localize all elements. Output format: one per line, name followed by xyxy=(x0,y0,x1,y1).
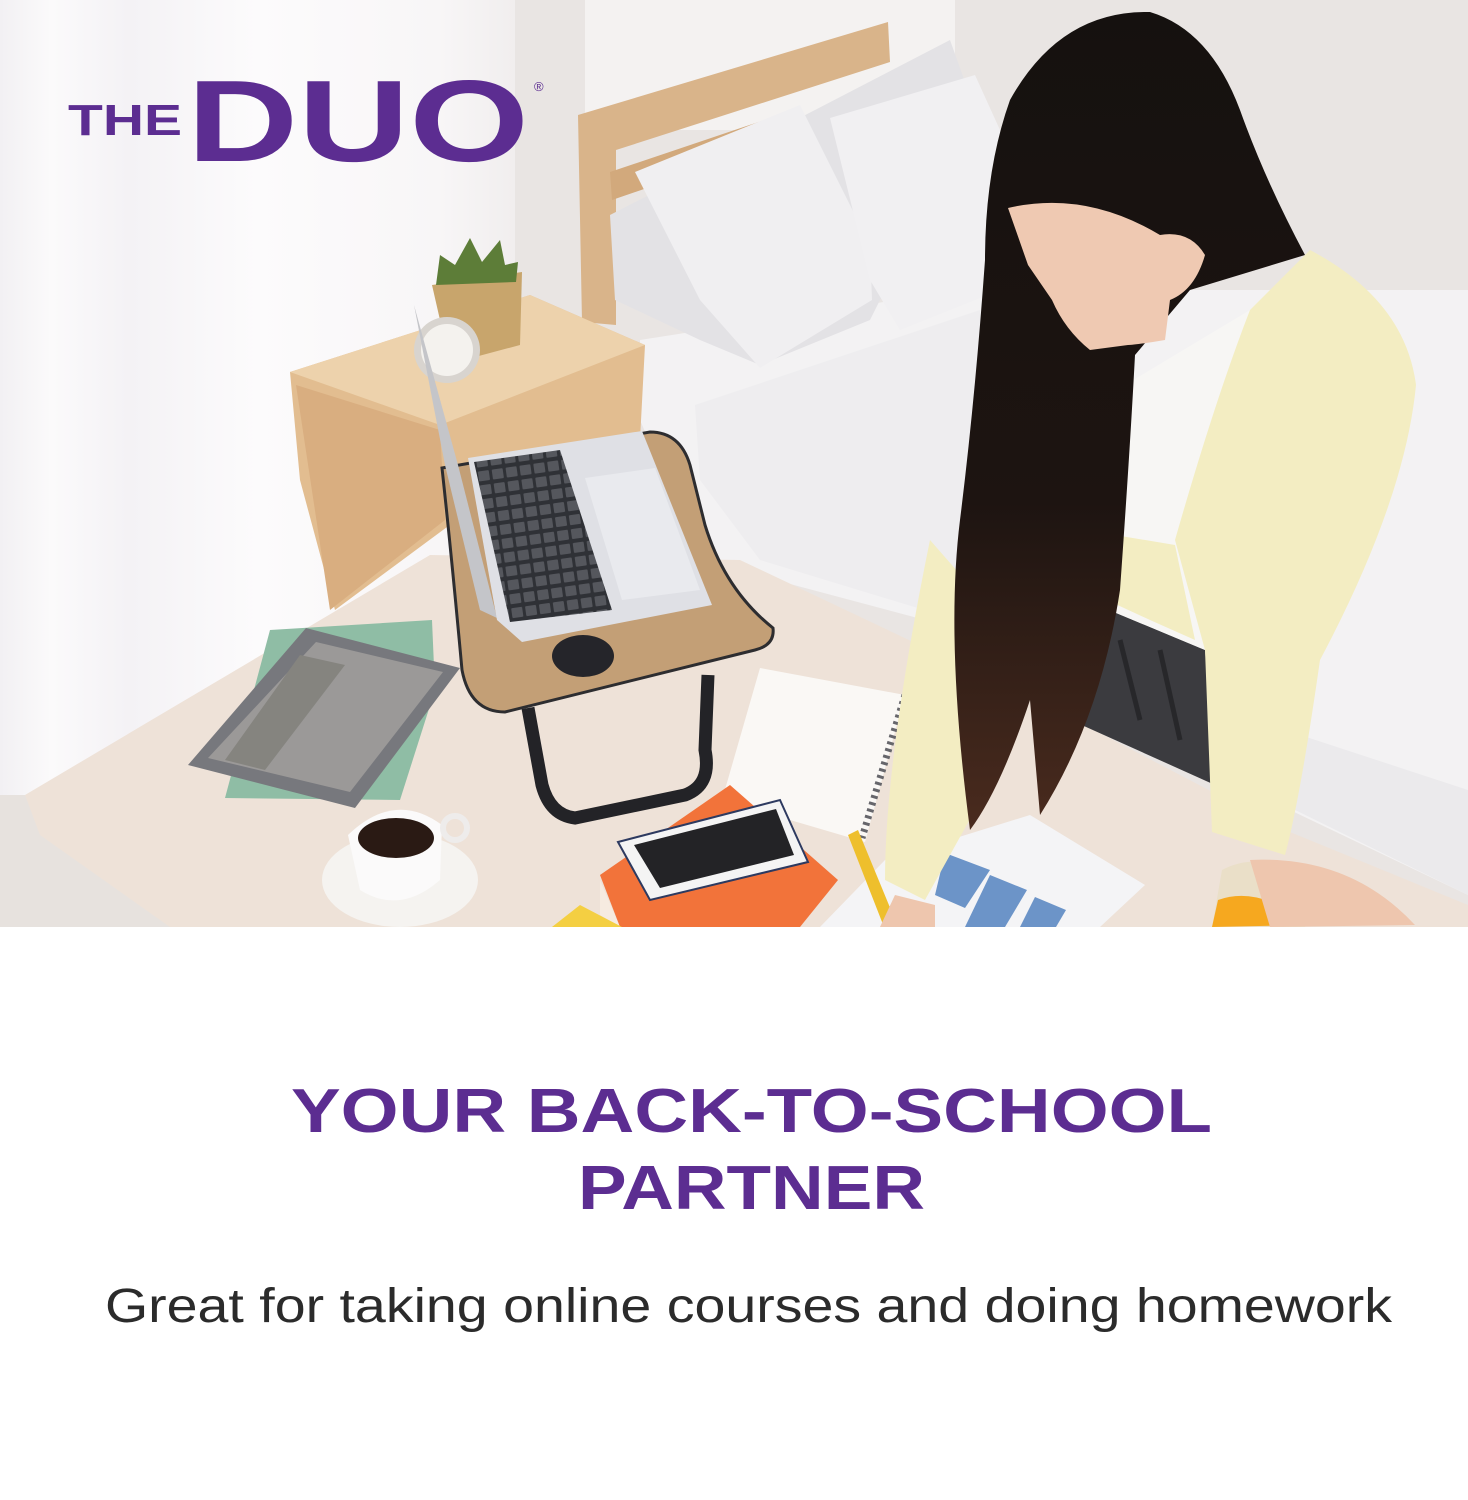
logo: The Duo: ® xyxy=(534,79,544,94)
bed headboard xyxy=(578,22,890,325)
green books and tablet xyxy=(188,620,460,808)
coffee cup and saucer xyxy=(322,810,478,927)
photo: student at desk with laptop tray xyxy=(0,0,1468,927)
laptop xyxy=(414,305,712,642)
tray with legs xyxy=(442,432,773,818)
bed and pillows xyxy=(610,40,1468,895)
room background xyxy=(0,0,1468,927)
logo: The Duo xyxy=(68,56,544,186)
nightstand with plant and clock xyxy=(290,238,645,610)
orange book and phone xyxy=(552,785,838,927)
heading: PARTNER xyxy=(578,1154,925,1223)
heading xyxy=(291,1077,1212,1223)
notebook xyxy=(722,668,905,842)
chart paper, pencil xyxy=(820,815,1145,927)
heading: YOUR BACK-TO-SCHOOL xyxy=(291,1077,1212,1146)
logo: The Duo: DUO xyxy=(187,56,529,186)
woman: cardigan and top xyxy=(880,250,1416,927)
logo: The Duo: THE xyxy=(68,96,182,145)
desk xyxy=(25,555,1468,927)
juice glass xyxy=(1212,862,1305,927)
subheading: Great for taking online courses and doing homework xyxy=(105,1280,1393,1333)
woman: face and hair xyxy=(954,12,1305,830)
